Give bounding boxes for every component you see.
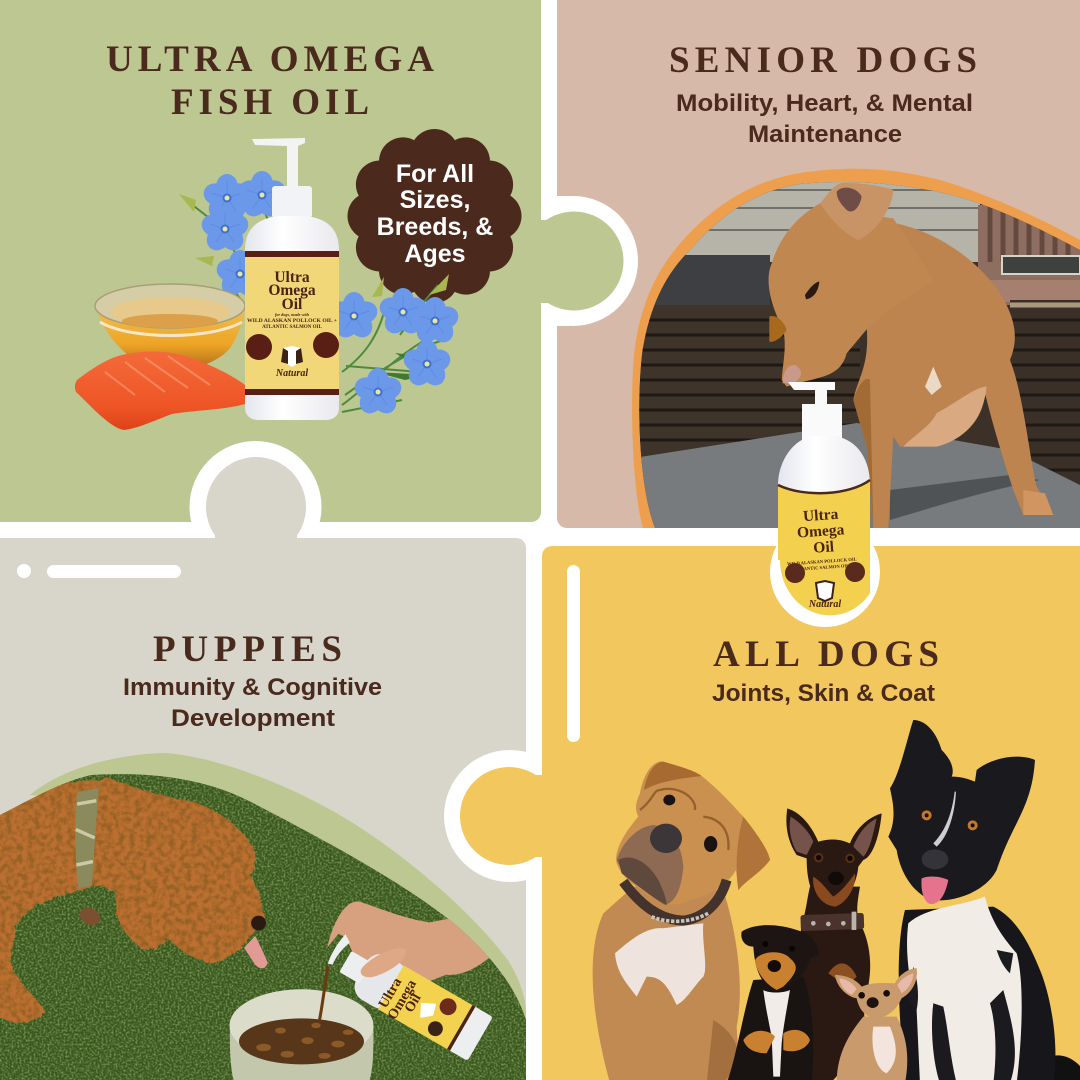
panel: All Dogs xyxy=(444,546,1080,1080)
white puzzle ring around bottle xyxy=(545,517,1080,627)
photo: senior dog on wicker couch xyxy=(630,170,1080,530)
dog collar and tag xyxy=(75,788,100,926)
oil stream xyxy=(319,966,328,1020)
hand holding bottle xyxy=(327,901,495,1061)
bottle label text: WILD ALASKAN POLLOCK OIL + xyxy=(247,319,337,324)
orange arc behind senior dog photo xyxy=(632,169,1080,528)
subtitle: Senior Dogs: Mobility, Heart, & Mental xyxy=(676,90,973,117)
title: Ultra Omega Fish Oil: FISH OIL xyxy=(171,82,369,123)
green arc behind puppy photo xyxy=(30,753,526,1080)
product group: flowers behind bottle xyxy=(179,171,461,418)
bottle label text xyxy=(247,269,337,330)
rotated label text: Ultra xyxy=(375,975,405,1011)
badge: For All Sizes, Breeds, & Ages: Sizes, xyxy=(400,186,470,214)
product bottle: Ultra Omega Oil: Natural xyxy=(275,368,308,379)
panel: Senior Dogs xyxy=(508,0,1080,528)
chihuahua xyxy=(835,968,917,1080)
dog nose and tongue xyxy=(244,916,268,968)
photo: group of dogs xyxy=(593,720,1080,1080)
senior dog product bottle: Natural xyxy=(808,599,841,610)
senior dog product bottle: ATLANTIC SALMON OIL xyxy=(794,563,849,572)
badge: For All Sizes, Breeds, & Ages xyxy=(348,129,522,303)
subtitle: Puppies: Immunity & Cognitive xyxy=(123,674,382,701)
siding and building background xyxy=(654,182,1080,305)
doberman xyxy=(786,808,882,1080)
seat cushion xyxy=(640,423,1080,530)
puppy dog xyxy=(0,777,264,1023)
cushion shadow xyxy=(890,475,1040,520)
senior dog product bottle xyxy=(778,382,870,620)
subtitle: Puppies: Development xyxy=(171,705,335,732)
subtitle: Puppies xyxy=(123,674,382,732)
panel: Puppies xyxy=(0,441,526,1080)
border collie xyxy=(888,720,1080,1080)
subtitle: Senior Dogs: Maintenance xyxy=(748,121,902,148)
rotated label text: Oil xyxy=(401,991,425,1015)
senior dog product bottle: Oil xyxy=(813,538,835,557)
subtitle: Senior Dogs xyxy=(676,90,973,148)
title: All Dogs: ALL DOGS xyxy=(713,634,939,675)
rotated label text: Omega xyxy=(384,977,420,1023)
small black and tan dog xyxy=(727,925,819,1080)
wicker couch xyxy=(639,300,1080,472)
badge: For All Sizes, Breeds, & Ages: For All xyxy=(396,160,474,188)
bottle label text: Oil xyxy=(282,296,303,313)
bowl of fish oil xyxy=(95,284,245,371)
senior dog product bottle: WILD ALASKAN POLLOCK OIL xyxy=(787,557,857,566)
subtitle: All Dogs: Joints, Skin & Coat xyxy=(712,680,935,707)
senior dog product bottle: Omega xyxy=(796,521,845,542)
photo: puppy on grass xyxy=(0,750,526,1080)
senior dog product bottle: Ultra xyxy=(802,506,839,525)
title: Senior Dogs: SENIOR DOGS xyxy=(669,40,977,81)
panel: Ultra Omega Fish Oil xyxy=(0,0,624,522)
badge: For All Sizes, Breeds, & Ages: Ages xyxy=(404,240,466,268)
title: Ultra Omega Fish Oil xyxy=(106,39,434,123)
white bar decoration, all dogs panel xyxy=(567,565,580,742)
bottle label text: Ultra xyxy=(274,269,310,286)
salmon fillet xyxy=(75,352,245,430)
bottle label text: for dogs, made with xyxy=(275,312,310,317)
bottle label text: ATLANTIC SALMON OIL xyxy=(262,325,322,330)
senior dog xyxy=(769,183,1053,528)
bottle label text: Omega xyxy=(268,282,316,299)
mastiff xyxy=(593,762,770,1080)
title: Puppies: PUPPIES xyxy=(153,629,342,670)
product bottle: Ultra Omega Oil xyxy=(245,138,339,420)
food bowl xyxy=(230,989,373,1080)
badge: For All Sizes, Breeds, & Ages: Breeds, & xyxy=(377,213,493,241)
white bar decoration, puppies panel xyxy=(17,564,181,578)
title: Ultra Omega Fish Oil: ULTRA OMEGA xyxy=(106,39,434,80)
